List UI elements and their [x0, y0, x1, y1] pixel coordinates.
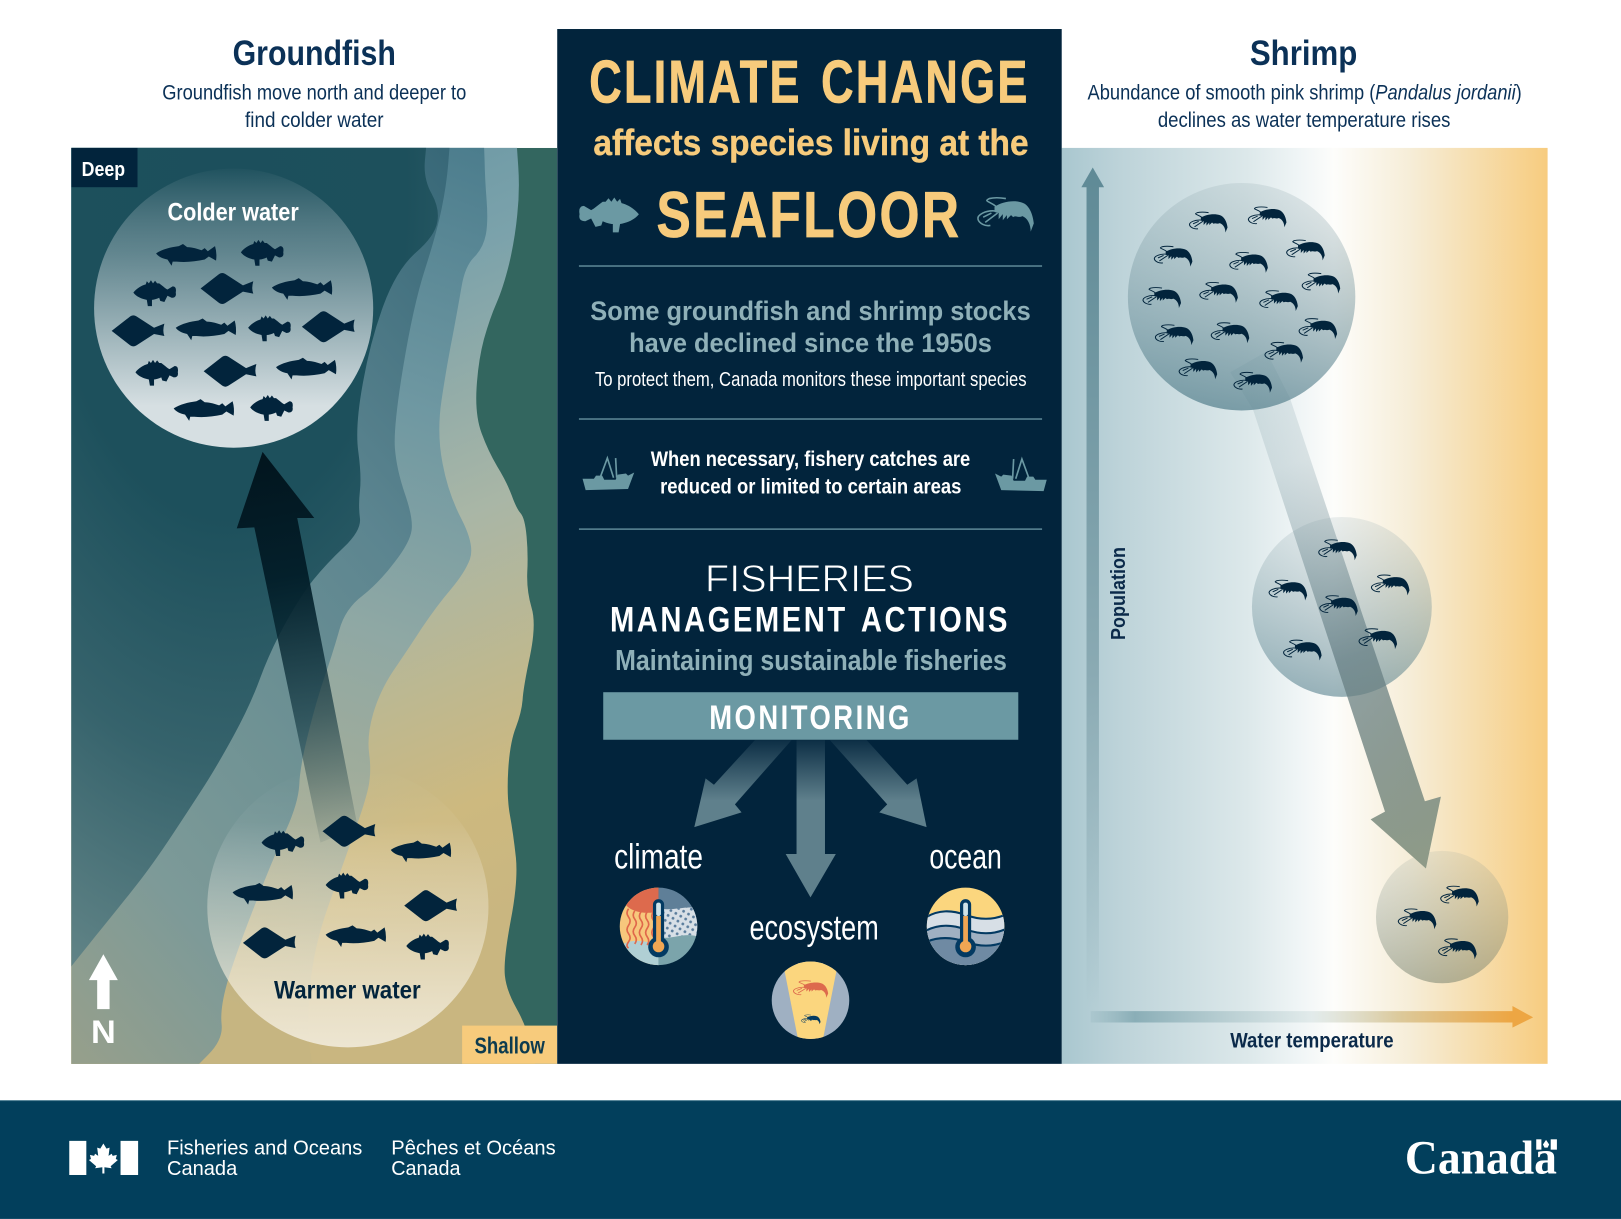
label: ocean: ocean [929, 837, 1002, 876]
logo: Canada wordmark: Canada [1405, 1132, 1557, 1184]
label: climate: climate [614, 837, 703, 876]
text: department name French: Pêches et Océans [391, 1137, 556, 1159]
heading: Groundfish: Groundfish [233, 34, 396, 73]
box: MONITORING [603, 692, 1018, 740]
icon: north arrow: N [91, 1014, 116, 1050]
icon: ocean [926, 887, 1005, 966]
text: groundfish description: find colder water [245, 109, 384, 132]
title: SEAFLOOR: SEAFLOOR [656, 178, 961, 251]
icon: north arrow [89, 954, 118, 1050]
text: department name English: Canada [167, 1158, 238, 1180]
label: Shallow: Shallow [475, 1033, 545, 1059]
icon: climate [619, 887, 698, 966]
axis arrow: water temperature [1091, 1006, 1533, 1028]
arrow: to ecosystem [786, 740, 836, 897]
text: department name French [391, 1137, 556, 1180]
text: stocks declined: Some groundfish and shrimp stocks [590, 296, 1031, 326]
text: fishery catches: When necessary, fishery catches are [651, 446, 970, 471]
text: stocks declined: have declined since the 1950s [629, 328, 992, 358]
text: groundfish description [162, 81, 466, 132]
label: Colder water: Colder water [167, 199, 299, 226]
text: shrimp description: declines as water temperature rises [1158, 109, 1450, 132]
shrimp group: medium population [1269, 540, 1409, 660]
panel: shrimp header [1088, 34, 1522, 132]
title: CLIMATE CHANGE: CLIMATE CHANGE [589, 48, 1030, 115]
population circle: low [1376, 851, 1508, 983]
icon: ecosystem [771, 961, 850, 1040]
text: fishery catches [651, 446, 970, 499]
icon: shrimp [978, 198, 1034, 232]
panel: shrimp chart [1062, 148, 1548, 1064]
arrow: population decline [1230, 352, 1441, 868]
heading: Shrimp: Shrimp [1250, 34, 1357, 73]
label: Deep: Deep [82, 158, 125, 181]
subheading: Maintaining sustainable fisheries: Maintaining sustainable fisheries [615, 645, 1007, 677]
heading: FISHERIES: FISHERIES [705, 557, 914, 600]
text: shrimp description: Abundance of smooth pink shrimp (Pandalus jordanii) [1088, 81, 1522, 104]
footer band [0, 1100, 1621, 1219]
label: Warmer water: Warmer water [274, 978, 421, 1005]
shrimp group: high population [1143, 207, 1340, 393]
colder water circle [94, 169, 373, 448]
panel: groundfish seafloor map [71, 142, 557, 1070]
title: affects species living at the: affects species living at the [593, 122, 1029, 163]
axis label: Population: Population [1107, 547, 1130, 640]
text: department name French: Canada [391, 1158, 461, 1180]
panel: groundfish header [162, 34, 466, 132]
box: MONITORING: MONITORING [709, 699, 912, 737]
shrimp group: low population [1398, 886, 1479, 959]
text: department name English: Fisheries and Oceans [167, 1137, 362, 1159]
icon: fishing boat left [583, 458, 634, 490]
label: Shallow [462, 1026, 557, 1064]
text: fishery catches: reduced or limited to certain areas [660, 474, 961, 499]
text: Canada monitors: To protect them, Canada monitors these important species [595, 368, 1027, 391]
fish school: colder water [112, 240, 355, 421]
logo: Canadian flag [69, 1141, 138, 1175]
label: ecosystem: ecosystem [750, 908, 879, 947]
axis label: Water temperature: Water temperature [1230, 1027, 1394, 1052]
seafloor depth contours [71, 142, 537, 1070]
text: shrimp description [1088, 81, 1522, 132]
fish school: warmer water [233, 816, 457, 959]
label: Deep [71, 148, 137, 187]
heading: MANAGEMENT ACTIONS: MANAGEMENT ACTIONS [610, 601, 1010, 640]
panel: central column [557, 29, 1062, 1064]
axis arrow: population [1081, 168, 1104, 1008]
text: groundfish description: Groundfish move north and deeper to [162, 81, 466, 104]
text: department name English [167, 1137, 362, 1180]
icon: fishing boat right [995, 459, 1047, 491]
arrow: to climate [694, 740, 792, 827]
text: stocks declined [590, 296, 1031, 358]
arrow: to ocean [830, 740, 927, 827]
population circle: medium [1252, 517, 1432, 697]
arrow: movement north and deeper [237, 452, 358, 843]
population circle: high [1128, 183, 1355, 410]
warmer water circle [207, 825, 488, 1048]
icon: fish [579, 198, 639, 232]
